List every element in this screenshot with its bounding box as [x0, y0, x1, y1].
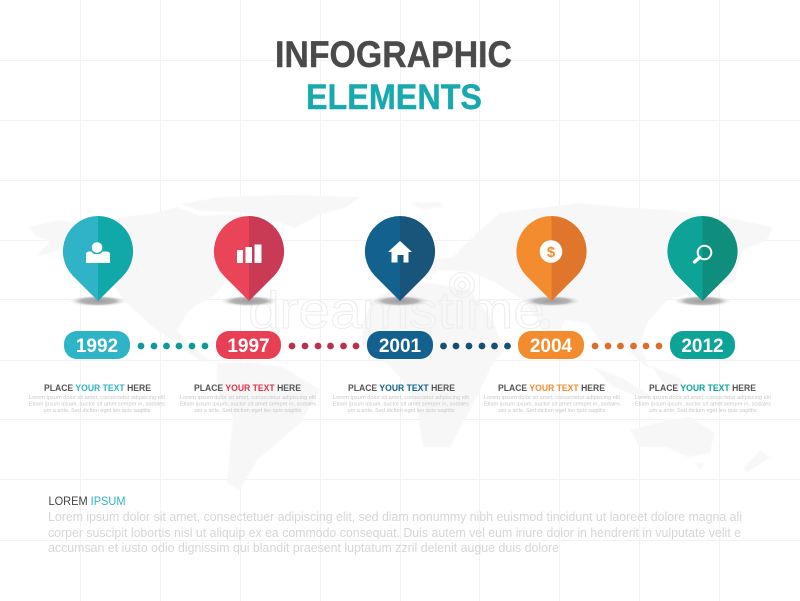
connector dots — [138, 343, 208, 349]
pin shadow — [69, 296, 127, 306]
world map background — [28, 195, 773, 490]
footer paragraph: accumsan et iusto odio dignissim qui blandit praesent luptatum zzril delenit augue duis dolore — [48, 540, 559, 555]
pin left half — [365, 216, 400, 301]
pin shadow — [371, 296, 429, 306]
caption heading: PLACE YOUR TEXT HERE — [194, 383, 301, 394]
timeline step 2012 — [635, 216, 772, 414]
pin right half — [702, 216, 738, 301]
year pill — [670, 331, 735, 359]
pin left half — [667, 216, 702, 301]
caption text: um a ante. Sed dictum eget leo quis sagittis — [194, 408, 302, 414]
caption text — [635, 395, 772, 414]
caption text: Lorem ipsum dolor sit amet, consectetur adipiscing elit — [484, 395, 621, 401]
footer text block — [48, 494, 742, 555]
caption text: Etiam ipsum ipsum, auctor sit amet semper in, sodales — [29, 402, 166, 408]
footer paragraph — [48, 509, 742, 555]
year pill — [518, 331, 584, 359]
year: 2004 — [530, 336, 573, 357]
pin right half — [98, 216, 133, 301]
icon: house — [388, 241, 412, 262]
pin right half — [400, 216, 435, 301]
pin left half — [214, 216, 249, 301]
caption text: um a ante. Sed dictum eget leo quis sagittis — [44, 408, 151, 414]
caption text: Lorem ipsum dolor sit amet, consectetur adipiscing elit — [333, 395, 470, 401]
caption heading: PLACE YOUR TEXT HERE — [649, 383, 756, 394]
year: 2012 — [681, 336, 724, 357]
year: 1997 — [227, 336, 270, 357]
pin left half — [516, 216, 552, 301]
year pill — [367, 331, 433, 359]
caption text: um a ante. Sed dictum eget leo quis sagittis — [650, 408, 757, 414]
year pill — [216, 331, 281, 359]
year: 2001 — [379, 336, 422, 357]
caption text: Etiam ipsum ipsum, auctor sit amet semper in, sodales — [484, 402, 621, 408]
caption text: Etiam ipsum ipsum, auctor sit amet semper in, sodales — [180, 402, 317, 408]
icon: bar chart — [237, 244, 262, 263]
caption heading: PLACE YOUR TEXT HERE — [44, 383, 151, 394]
pin shadow — [674, 296, 732, 306]
pin right half — [249, 216, 284, 301]
icon: dollar coin — [540, 240, 562, 263]
caption text: Lorem ipsum dolor sit amet, consectetur adipiscing elit — [29, 395, 166, 401]
caption text: um a ante. Sed dictum eget leo quis sagittis — [498, 408, 606, 414]
footer heading: LOREM IPSUM — [48, 494, 126, 508]
icon: dollar coin: $ — [547, 244, 556, 261]
watermark: dreamstime — [248, 282, 545, 340]
title: INFOGRAPHIC — [275, 34, 512, 75]
connector dots — [440, 343, 511, 349]
caption text — [484, 395, 621, 414]
connector dots — [289, 343, 359, 349]
year pill — [64, 331, 130, 359]
title — [275, 34, 512, 117]
timeline step 1997 — [180, 216, 359, 414]
pin left half — [63, 216, 98, 301]
pin shadow — [522, 296, 580, 306]
connector dots — [592, 343, 662, 349]
pin right half — [552, 216, 587, 301]
icon: person — [86, 241, 110, 263]
caption text — [180, 395, 317, 414]
title: elements: ELEMENTS — [306, 78, 482, 117]
caption text: Lorem ipsum dolor sit amet, consectetur adipiscing elit — [180, 395, 317, 401]
caption heading: PLACE YOUR TEXT HERE — [348, 383, 455, 394]
pin shadow — [220, 296, 278, 306]
caption heading: PLACE YOUR TEXT HERE — [498, 383, 605, 394]
year: 1992 — [76, 336, 118, 357]
caption text: Etiam ipsum ipsum, auctor sit amet semper in, sodales — [635, 402, 772, 408]
caption text: um a ante. Sed dictum eget leo quis sagittis — [348, 408, 455, 414]
caption text: Etiam ipsum ipsum, auctor sit amet semper in, sodales — [333, 402, 470, 408]
caption text — [29, 395, 166, 414]
footer paragraph: corper suscipit lobortis nisl ut aliquip ex ea commodo consequat. Duis autem vel eum iriure dolor in hendrerit in vulputate velit e — [48, 525, 741, 540]
icon: magnifier — [694, 246, 711, 262]
footer paragraph: Lorem ipsum dolor sit amet, consectetuer adipiscing elit, sed diam nonummy nibh euismod tincidunt ut laoreet dolore magna ali — [48, 509, 742, 524]
timeline step 2004 — [484, 216, 662, 414]
caption text: Lorem ipsum dolor sit amet, consectetur adipiscing elit — [635, 395, 772, 401]
timeline step 2001 — [333, 216, 511, 414]
caption text — [333, 395, 470, 414]
timeline step 1992 — [29, 216, 208, 414]
